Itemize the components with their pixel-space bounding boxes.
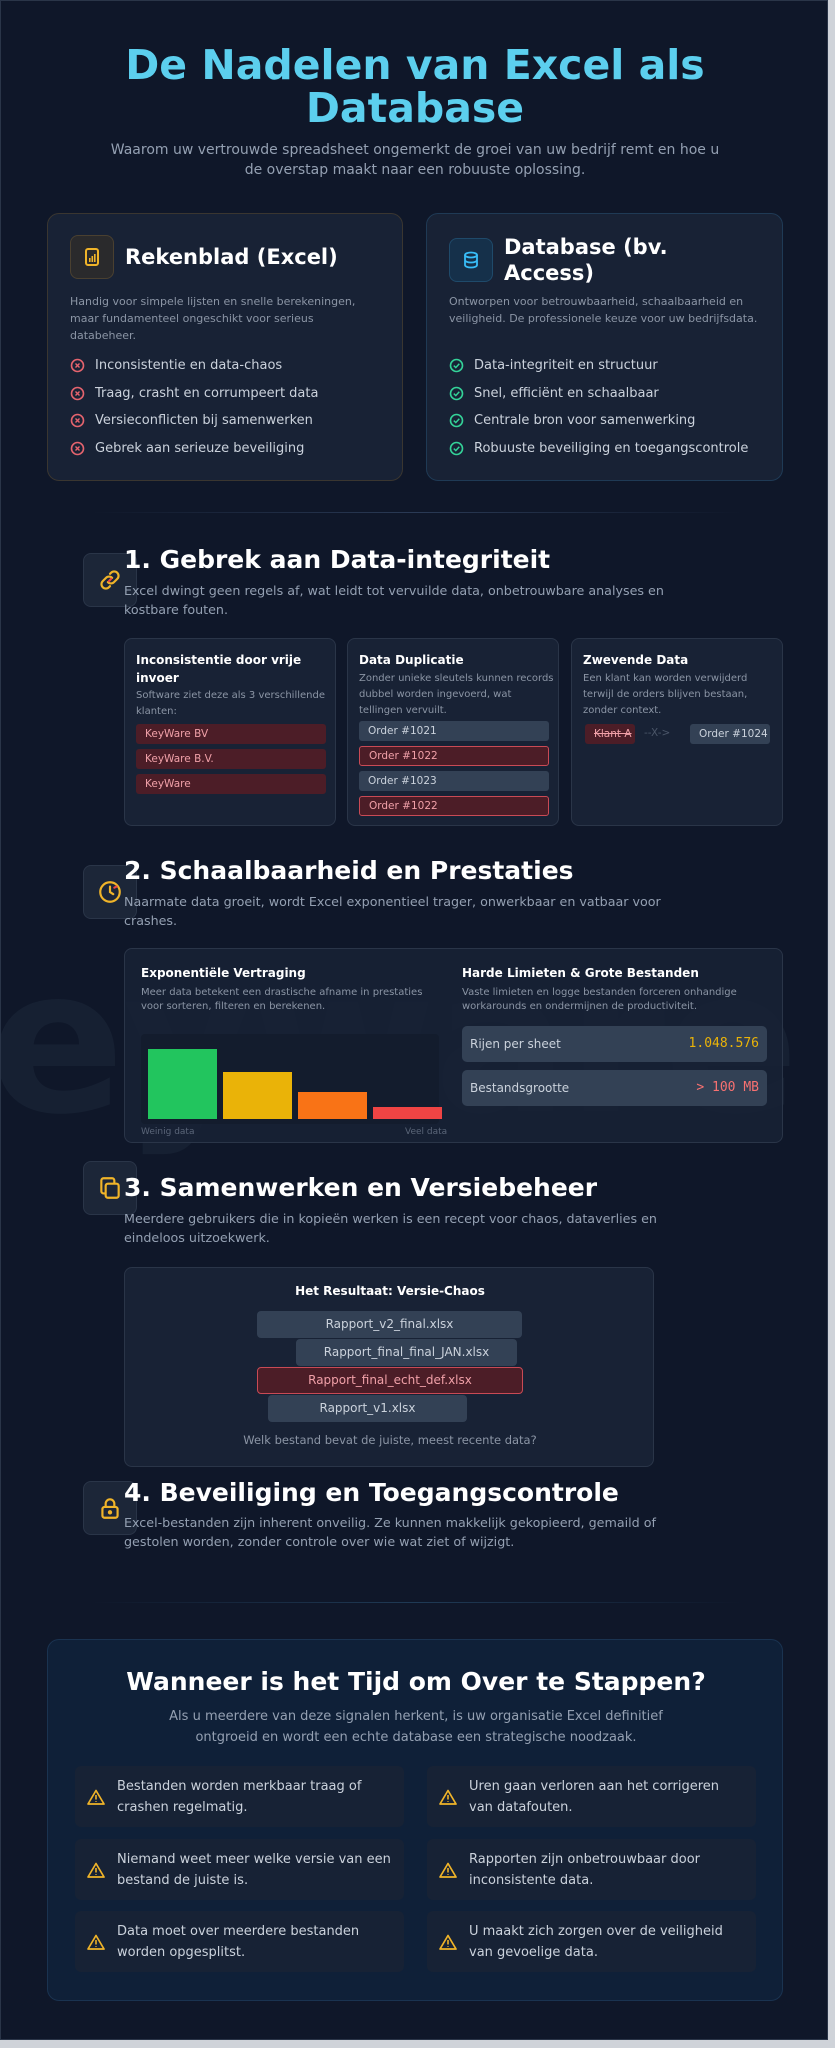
file stack: Rapport_v2_final.xlsx: [326, 1317, 453, 1331]
stat: file size: [462, 1070, 767, 1106]
list: cons: Gebrek aan serieuze beveiliging: [95, 441, 304, 456]
chart heading: Exponentiële Vertraging: [141, 966, 306, 980]
panel: database: [426, 213, 783, 481]
subtitle: Waarom uw vertrouwde spreadsheet ongemerkt de groei van uw bedrijf remt en hoe u de overstap maakt naar een robuuste oplossing.: [111, 142, 719, 178]
list: pros: Data-integriteit en structuur: [474, 358, 658, 373]
list: cons: Versieconflicten bij samenwerken: [95, 413, 313, 428]
stat: file size: > 100 MB: [696, 1080, 759, 1095]
card: inconsistentie: KeyWare: [145, 778, 191, 790]
card: duplicatie: Order #1022: [369, 800, 438, 812]
heading: excel: Rekenblad (Excel): [125, 245, 338, 269]
heading: section 3: 3. Samenwerken en Versiebeheer: [124, 1173, 597, 1202]
panel: performance: Meer data betekent een drastische afname in prestaties voor sorteren, filteren en berekenen.: [141, 987, 422, 1012]
card: inconsistentie: KeyWare B.V.: [145, 753, 214, 765]
list: pros: Centrale bron voor samenwerking: [474, 413, 695, 428]
bar chart: [141, 1034, 439, 1124]
file stack: [257, 1311, 522, 1338]
icon: link: [83, 553, 137, 607]
panel: version chaos: [124, 1267, 654, 1467]
panel: performance: Veel data: [405, 1127, 447, 1137]
panel: performance: Vaste limieten en logge bestanden forceren onhandige workarounds en ondermijnen de productiviteit.: [462, 987, 737, 1012]
warning items: Bestanden worden merkbaar traag of crashen regelmatig.: [117, 1778, 361, 1814]
description: database: Ontworpen voor betrouwbaarheid, schaalbaarheid en veiligheid. De professionele keuze voor uw bedrijfsdata.: [449, 295, 757, 325]
card: duplicatie: Order #1023: [368, 775, 437, 787]
heading: section 4: 4. Beveiliging en Toegangscontrole: [124, 1478, 619, 1507]
panel: excel: [47, 213, 403, 481]
card: zwevende data: Klant A: [594, 728, 632, 740]
card: duplicatie: Order #1022: [369, 750, 438, 762]
card: zwevende data: [571, 638, 783, 826]
warning items: [87, 1778, 723, 1960]
text: section 3: Meerdere gebruikers die in kopieën werken is een recept voor chaos, dataverlies en eindeloos uitzoekwerk.: [124, 1211, 657, 1245]
icon: copy: [83, 1161, 137, 1215]
stat: rows: 1.048.576: [689, 1036, 759, 1051]
card: duplicatie: Data Duplicatie: [359, 653, 464, 667]
card: duplicatie: Order #1021: [368, 725, 437, 737]
card: zwevende data: Order #1024: [699, 728, 768, 740]
heading: section 2: 2. Schaalbaarheid en Prestaties: [124, 856, 574, 885]
title: De Nadelen van Excel als: [125, 41, 705, 89]
card: zwevende data: Een klant kan worden verwijderd terwijl de orders blijven bestaan, zonder context.: [583, 673, 747, 716]
card: inconsistentie: [124, 638, 336, 826]
card: inconsistentie: Inconsistentie door vrije invoer: [136, 653, 301, 685]
list: cons: Traag, crasht en corrumpeert data: [95, 386, 318, 401]
panel: version chaos: Rapport_v1.xlsx: [320, 1401, 415, 1415]
text: section 4: Excel-bestanden zijn inherent onveilig. Ze kunnen makkelijk gekopieerd, gemaild of gestolen worden, zonder controle over wie wat ziet of wijzigt.: [124, 1515, 656, 1549]
list: pros: Snel, efficiënt en schaalbaar: [474, 386, 659, 401]
description: excel: Handig voor simpele lijsten en snelle berekeningen, maar fundamenteel ongeschikt voor serieus databeheer.: [70, 295, 355, 342]
heading: section 1: 1. Gebrek aan Data-integriteit: [124, 545, 550, 574]
stat: file size: Bestandsgrootte: [470, 1081, 569, 1095]
text: section 2: Naarmate data groeit, wordt Excel exponentieel trager, onwerkbaar en vatbaar voor crashes.: [124, 894, 661, 928]
panel: performance: [124, 948, 783, 1143]
list: pros: [450, 358, 748, 456]
icon: database: [449, 238, 493, 282]
text: cta: Als u meerdere van deze signalen herkent, is uw organisatie Excel definitief ontgroeid en wordt een echte database een strategische noodzaak.: [169, 1709, 663, 1745]
icon: excel: [70, 235, 114, 279]
card: duplicatie: Zonder unieke sleutels kunnen records dubbel worden ingevoerd, wat tellingen vervuilt.: [359, 673, 554, 716]
warning items: Niemand weet meer welke versie van een bestand de juiste is.: [117, 1852, 391, 1888]
panel: version chaos: Welk bestand bevat de juiste, meest recente data?: [243, 1433, 537, 1447]
list: cons: [70, 358, 318, 456]
warning items: U maakt zich zorgen over de veiligheid van gevoelige data.: [469, 1924, 723, 1960]
icon: lock: [83, 1481, 137, 1535]
limits heading: Harde Limieten & Grote Bestanden: [462, 966, 699, 980]
card: inconsistentie: KeyWare BV: [145, 728, 208, 740]
card: zwevende data: Zwevende Data: [583, 653, 688, 667]
card: duplicatie: [347, 638, 559, 826]
list: cons: Inconsistentie en data-chaos: [95, 358, 282, 373]
stat: rows: Rijen per sheet: [470, 1037, 561, 1051]
panel: version chaos: Het Resultaat: Versie-Chaos: [295, 1284, 485, 1298]
warning items: Rapporten zijn onbetrouwbaar door inconsistente data.: [469, 1852, 700, 1888]
heading: database: Database (bv. Access): [504, 235, 668, 285]
card: inconsistentie: Software ziet deze als 3 verschillende klanten:: [136, 690, 325, 717]
icon: clock: [83, 865, 137, 919]
title: [125, 41, 705, 132]
list: pros: Robuuste beveiliging en toegangscontrole: [474, 441, 748, 456]
panel: wanneer overstappen: [47, 1639, 783, 2001]
panel: version chaos: Rapport_final_echt_def.xlsx: [308, 1373, 472, 1387]
stat: rows: [462, 1026, 767, 1062]
text: section 1: Excel dwingt geen regels af, wat leidt tot vervuilde data, onbetrouwbare analyses en kostbare fouten.: [124, 583, 664, 617]
warning items: Data moet over meerdere bestanden worden opgesplitst.: [117, 1924, 359, 1960]
card: zwevende data: --X->: [644, 727, 670, 739]
panel: performance: Weinig data: [141, 1127, 194, 1137]
heading: cta: Wanneer is het Tijd om Over te Stappen?: [126, 1667, 706, 1696]
warning items: Uren gaan verloren aan het corrigeren van datafouten.: [469, 1778, 719, 1814]
title: Database: [306, 84, 524, 132]
panel: version chaos: Rapport_final_final_JAN.xlsx: [324, 1345, 489, 1359]
